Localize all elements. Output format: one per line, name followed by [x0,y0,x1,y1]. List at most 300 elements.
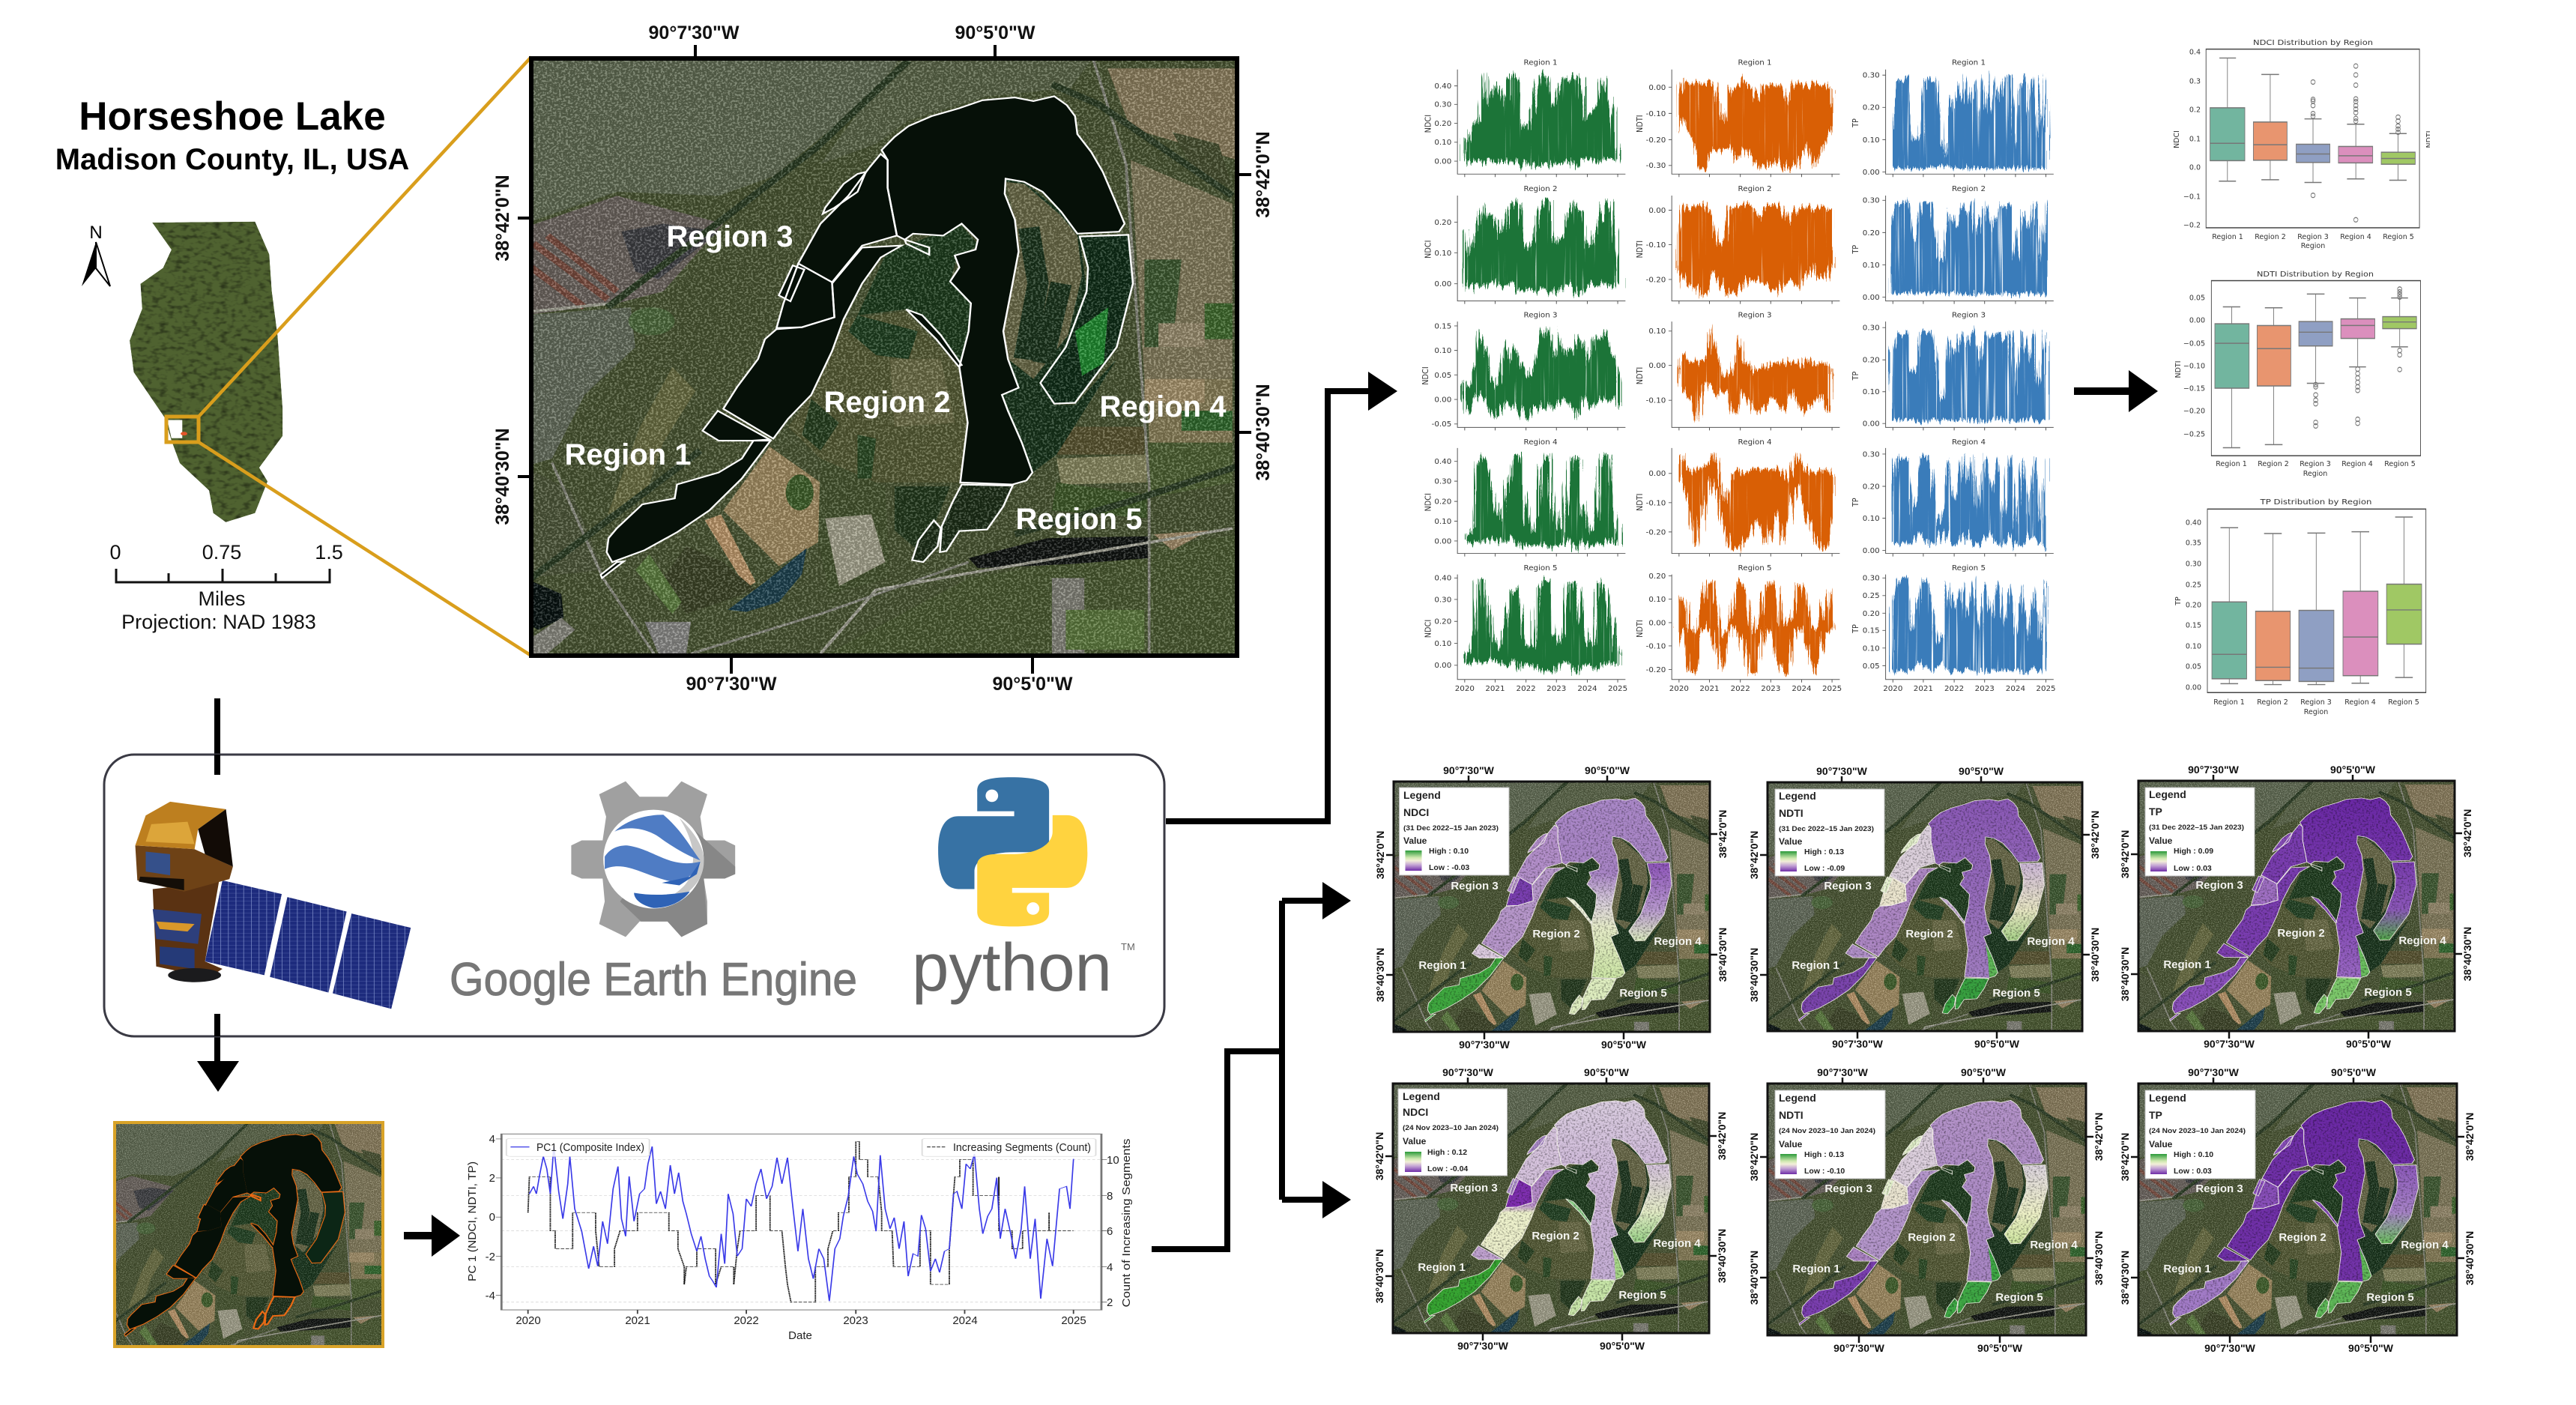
map: NDCI 24 Nov 2023 to 10 Jan 2024: Region 5 [1618,1289,1666,1302]
column: NDCI time series: 0.30 [1434,101,1451,109]
column: NDCI time series: 0.30 [1434,478,1451,486]
map: NDCI 31 Dec 2022 to 15 Jan 2023: Region 2 [1532,928,1580,940]
chart: PC1 composite index and increasing segments: Date [788,1329,812,1342]
chart: TP box plot: Region 1 [2213,698,2245,707]
chart: PC1 composite index and increasing segments: 8 [1107,1190,1113,1203]
column: NDCI time series: 0.40 [1434,82,1451,91]
column: TP time series: 0.10 [1863,645,1880,653]
chart: NDCI box plot [2173,39,2434,250]
legend [1400,788,1509,875]
map: NDTI 24 Nov 2023 to 10 Jan 2024: 38°40'30"N [2093,1231,2105,1285]
PC1 line [530,1146,1074,1301]
legend: NDTI [1779,1109,1803,1121]
legend: Legend [1779,790,1816,802]
chart: NDTI box plot: Region 3 [2300,460,2331,468]
chart: NDTI box plot: NDTI [2174,360,2183,378]
column: TP time series: 0.20 [1863,357,1880,365]
column: NDCI time series: 0.10 [1434,139,1451,147]
map: TP 31 Dec 2022 to 15 Jan 2023: 38°42'0"N [2461,809,2473,857]
column: NDTI time series: -0.10 [1646,499,1666,507]
chart: NDTI box plot: Region 5 [2384,460,2416,468]
legend: (31 Dec 2022–15 Jan 2023) [1779,825,1874,833]
map: NDTI 31 Dec 2022 to 15 Jan 2023: 38°42'0"N [1748,831,1760,879]
map: NDCI 24 Nov 2023 to 10 Jan 2024: 90°7'30"W [1442,1066,1494,1078]
map: NDCI 31 Dec 2022 to 15 Jan 2023: 38°40'30"N [1717,928,1729,982]
column: TP time series: 0.00 [1863,294,1880,302]
column: NDCI time series: 0.10 [1434,250,1451,258]
column: NDTI time series: NDTI [1636,367,1645,384]
column: NDTI time series: -0.20 [1646,529,1666,537]
arrow: time series to box plots [2074,370,2158,412]
map: NDTI 24 Nov 2023 to 10 Jan 2024: 90°5'0"W [1977,1342,2023,1354]
legend: Value [2149,836,2173,846]
legend: Low : -0.10 [1804,1167,1845,1176]
column: TP time series: 0.00 [1863,169,1880,177]
panel: main study area map [492,22,1274,695]
map: TP 31 Dec 2022 to 15 Jan 2023: Region 3 [2195,879,2243,892]
map: NDTI 31 Dec 2022 to 15 Jan 2023: Region 1 [1792,959,1839,972]
chart: NDCI box plot: −0.2 [2183,222,2201,229]
column: TP time series: 0.25 [1863,592,1880,600]
legend: (31 Dec 2022–15 Jan 2023) [2149,824,2244,832]
map: NDCI 24 Nov 2023 to 10 Jan 2024: Region 1 [1418,1261,1466,1274]
legend: High : 0.10 [2174,1150,2213,1159]
column: NDTI time series: 0.00 [1648,84,1666,92]
map: TP 24 Nov 2023 to 10 Jan 2024 [2119,1066,2480,1374]
column: TP time series: TP [1852,245,1860,255]
map: NDCI 31 Dec 2022 to 15 Jan 2023: 90°7'30"W [1443,764,1495,776]
legend: Low : 0.03 [2174,864,2212,873]
column: NDCI time series: 0.00 [1434,396,1451,404]
chart: NDTI box plot: Region 2 [2258,460,2289,468]
icon: north arrow [82,223,110,286]
legend: Legend [1779,1092,1816,1104]
column: TP time series: 0.10 [1863,515,1880,523]
column: TP time series: 0.20 [1863,483,1880,491]
panel: main study area map: 90°7'30"W [649,22,740,43]
map: NDTI 24 Nov 2023 to 10 Jan 2024: 90°7'30"W [1833,1342,1885,1354]
column: NDCI time series: 0.10 [1434,518,1451,526]
column: TP time series: 0.30 [1863,575,1880,583]
column: NDTI time series: Region 5 [1738,564,1772,572]
chart: PC1 composite index and increasing segments [466,1133,1133,1342]
map: NDTI 24 Nov 2023 to 10 Jan 2024: Region 5 [1995,1291,2043,1304]
chart: NDCI box plot: 0.0 [2189,163,2201,172]
map: NDTI 31 Dec 2022 to 15 Jan 2023: Region 5 [1992,987,2040,1000]
map: TP 24 Nov 2023 to 10 Jan 2024: 38°40'30"N [2464,1231,2476,1285]
column: NDTI time series: Region 3 [1738,312,1772,319]
column: TP time series: Region 5 [1952,564,1986,572]
column: TP time series: 2023 [1975,685,1995,693]
chart: NDTI box plot: Region 4 [2341,460,2373,468]
map: TP 31 Dec 2022 to 15 Jan 2023: Region 5 [2364,986,2412,999]
map: NDCI 31 Dec 2022 to 15 Jan 2023: 90°5'0"W [1585,764,1630,776]
panel: main study area map: 90°5'0"W [992,674,1073,695]
column: NDCI time series: 0.00 [1434,538,1451,546]
map: NDTI 31 Dec 2022 to 15 Jan 2023: 90°7'30"W [1816,765,1868,777]
column: NDCI time series: 0.00 [1434,280,1451,288]
column: NDTI time series: -0.20 [1646,136,1666,145]
legend: High : 0.12 [1427,1148,1467,1157]
panel: tools box [104,755,1164,1036]
legend [2145,1090,2255,1179]
map: NDTI 31 Dec 2022 to 15 Jan 2023: 90°5'0"W [1959,765,2004,777]
column: NDTI time series: 0.00 [1648,362,1666,370]
chart: NDTI box plot: Region 1 [2216,460,2247,468]
column: NDCI time series: 0.15 [1434,323,1451,330]
chart: PC1 composite index and increasing segments: 2 [489,1172,495,1185]
column: NDCI time series: 0.20 [1434,618,1451,626]
column: TP time series: TP [1852,624,1860,634]
map: NDCI 24 Nov 2023 to 10 Jan 2024: 38°42'0"N [1716,1112,1728,1160]
panel: main study area map: 90°7'30"W [686,674,777,695]
legend: NDCI [1403,1106,1428,1118]
chart: TP box plot: 0.30 [2186,561,2201,568]
map: NDCI 31 Dec 2022 to 15 Jan 2023: Region 3 [1451,880,1499,892]
legend: Low : 0.03 [2174,1167,2212,1176]
column: NDTI time series: 0.00 [1648,207,1666,215]
panel: main study area map: Region 5 [1016,503,1142,536]
map: NDCI 31 Dec 2022 to 15 Jan 2023: 38°42'0"N [1374,831,1386,879]
column: TP time series: TP [1852,372,1860,381]
map: NDTI 31 Dec 2022 to 15 Jan 2023: 38°40'30"N [2089,928,2101,982]
chart: TP box plot: 0.25 [2186,581,2201,589]
column: NDCI time series: 0.10 [1434,640,1451,648]
panel: satellite inset with lake outline [94,1113,399,1379]
legend: Low : -0.03 [1429,863,1469,872]
chart: TP box plot: TP Distribution by Region [2259,498,2372,507]
chart: PC1 composite index and increasing segments: PC1 (Composite Index) [536,1141,644,1154]
map: NDTI 24 Nov 2023 to 10 Jan 2024: 90°5'0"W [1961,1066,2007,1078]
chart: PC1 composite index and increasing segments: 4 [489,1133,495,1146]
column: TP time series [1852,59,2056,693]
legend: Value [1403,836,1427,846]
column: TP time series: 0.30 [1863,324,1880,333]
chart: NDCI box plot: −0.1 [2183,193,2201,201]
column: NDCI time series: 0.00 [1434,158,1451,166]
scale bar: Projection: NAD 1983 [121,611,316,633]
map: NDCI 31 Dec 2022 to 15 Jan 2023: 38°40'30"N [1374,948,1386,1002]
chart: NDCI box plot: NDTI [2425,130,2434,148]
scale bar: 1.5 [315,541,343,563]
title: Horseshoe Lake [79,94,386,139]
map: NDTI 24 Nov 2023 to 10 Jan 2024: Region 1 [1792,1263,1840,1275]
map: NDCI 24 Nov 2023 to 10 Jan 2024: Region 4 [1653,1237,1701,1250]
panel: main study area map: Region 1 [565,438,691,471]
map: NDTI 31 Dec 2022 to 15 Jan 2023: 90°5'0"W [1974,1038,2020,1050]
chart: NDTI box plot: −0.20 [2183,408,2205,415]
map: NDCI 31 Dec 2022 to 15 Jan 2023: 38°42'0"N [1717,810,1729,858]
map: NDCI 31 Dec 2022 to 15 Jan 2023: Region 1 [1418,959,1466,972]
legend: High : 0.13 [1804,847,1844,856]
chart: PC1 composite index and increasing segments: 2 [1107,1296,1113,1309]
map: TP 24 Nov 2023 to 10 Jan 2024: 90°5'0"W [2331,1066,2377,1078]
icon: north arrow: N [89,223,103,243]
legend: TP [2149,1109,2162,1121]
legend [1775,1090,1885,1179]
chart: NDCI box plot: NDCI Distribution by Region [2253,39,2373,47]
panel: main study area map: 38°42'0"N [1253,131,1274,218]
column: NDTI time series: -0.10 [1646,110,1666,118]
legend: Legend [1403,789,1441,801]
chart: PC1 composite index and increasing segments: 2020 [515,1314,541,1327]
chart: NDTI box plot: Region [2303,470,2327,478]
column: NDCI time series [1422,59,1627,693]
legend: TP [2149,806,2162,818]
Illinois locator map [130,222,282,522]
chart: NDTI box plot: −0.25 [2183,430,2205,439]
map: NDCI 31 Dec 2022 to 15 Jan 2023: 90°7'30"W [1459,1039,1511,1051]
column: NDCI time series: 0.20 [1434,498,1451,506]
chart: NDTI box plot [2174,271,2421,478]
chart: PC1 composite index and increasing segments: 2023 [843,1314,868,1327]
column: NDTI time series: 0.10 [1648,596,1666,604]
column: TP time series: 0.00 [1863,547,1880,555]
column: NDCI time series: NDCI [1422,366,1430,385]
map: NDTI 24 Nov 2023 to 10 Jan 2024: Region 2 [1908,1231,1956,1244]
column: TP time series: 2025 [2036,685,2056,693]
map: TP 24 Nov 2023 to 10 Jan 2024: 90°5'0"W [2348,1342,2394,1354]
column: NDCI time series: 2021 [1485,685,1505,693]
legend: Low : -0.04 [1427,1164,1468,1173]
map: NDCI 24 Nov 2023 to 10 Jan 2024: 90°5'0"W [1584,1066,1630,1078]
chart: TP box plot: Region 3 [2300,698,2332,707]
column: NDTI time series: 0.00 [1648,620,1666,627]
column: TP time series: 0.10 [1863,136,1880,145]
column: TP time series: 2020 [1883,685,1902,693]
chart: PC1 composite index and increasing segments: -2 [486,1251,495,1263]
chart panel: time series small multiples [1422,59,2056,693]
map: NDTI 24 Nov 2023 to 10 Jan 2024: 38°40'30"N [1748,1251,1760,1305]
column: TP time series: TP [1852,498,1860,507]
column: TP time series: 0.05 [1863,662,1880,671]
column: TP time series: TP [1852,118,1860,128]
map: TP 31 Dec 2022 to 15 Jan 2023: Region 1 [2163,958,2211,971]
column: NDCI time series: 2022 [1517,685,1536,693]
zoom lines to study area [199,57,531,656]
column: TP time series: 0.30 [1863,451,1880,459]
column: TP time series: 0.20 [1863,610,1880,618]
column: NDCI time series: Region 1 [1524,59,1558,67]
map: TP 31 Dec 2022 to 15 Jan 2023: Region 2 [2277,927,2325,940]
scale bar: 0 [109,541,121,563]
column: NDCI time series: 0.10 [1434,347,1451,355]
chart: TP box plot: 0.40 [2186,519,2201,528]
column: NDTI time series: 0.00 [1648,470,1666,478]
column: TP time series: 2024 [2006,685,2025,693]
map: NDCI 31 Dec 2022 to 15 Jan 2023 [1374,764,1733,1070]
legend [2145,788,2255,876]
arrow: composite chart to maps [1152,882,1351,1249]
legend [1398,1089,1508,1176]
title: Madison County, IL, USA [55,143,409,176]
chart: NDCI box plot: 0.1 [2189,135,2201,144]
column: NDCI time series: 2024 [1577,685,1597,693]
scale bar: 0.75 [202,541,241,563]
chart: NDCI box plot: Region 4 [2340,233,2371,241]
column: NDTI time series: 2020 [1669,685,1689,693]
column: NDTI time series: 2021 [1699,685,1720,693]
column: NDCI time series: 0.05 [1434,372,1451,380]
chart: TP box plot [2174,498,2426,716]
map: NDCI 24 Nov 2023 to 10 Jan 2024: 90°5'0"W [1600,1340,1645,1352]
text: Google Earth Engine: Google Earth Engine [450,954,857,1006]
column: TP time series: 2021 [1914,685,1933,693]
column: NDTI time series: NDTI [1636,241,1645,259]
legend: (24 Nov 2023–10 Jan 2024) [1403,1124,1499,1132]
panel: main study area map: Region 3 [667,220,793,253]
map: NDTI 31 Dec 2022 to 15 Jan 2023: Region 3 [1824,880,1872,892]
column: NDCI time series: NDCI [1424,115,1433,133]
map: NDCI 24 Nov 2023 to 10 Jan 2024: Region 2 [1532,1230,1579,1242]
chart: NDTI box plot: −0.15 [2183,385,2205,393]
chart: TP box plot: 0.35 [2186,540,2201,547]
column: NDTI time series: Region 4 [1738,438,1772,447]
column: NDCI time series: Region 3 [1524,312,1558,319]
panel: main study area map: 38°40'30"N [1253,384,1274,481]
column: NDTI time series: -0.20 [1646,666,1666,674]
chart: NDCI box plot: Region 5 [2383,233,2414,241]
column: NDTI time series: -0.10 [1646,241,1666,250]
map: NDTI 31 Dec 2022 to 15 Jan 2023: 38°42'0"N [2089,811,2101,859]
chart: TP box plot: Region 2 [2257,698,2288,707]
chart: PC1 composite index and increasing segments: Increasing Segments (Count) [953,1141,1091,1154]
column: NDTI time series: -0.30 [1646,162,1666,170]
icon: Python logo [938,777,1087,926]
column: TP time series: 0.30 [1863,72,1880,80]
legend: Legend [1403,1090,1440,1102]
column: TP time series: Region 4 [1952,438,1986,447]
column: NDTI time series: -0.10 [1646,643,1666,650]
icon: Google Earth Engine gear [571,782,735,937]
map: NDCI 24 Nov 2023 to 10 Jan 2024: 38°40'30"N [1373,1249,1385,1303]
column: NDCI time series: 0.40 [1434,458,1451,466]
column: TP time series: 0.20 [1863,229,1880,238]
map: NDTI 24 Nov 2023 to 10 Jan 2024: 38°42'0"N [2093,1113,2105,1161]
map: TP 24 Nov 2023 to 10 Jan 2024: 90°7'30"W [2204,1342,2256,1354]
map: NDCI 24 Nov 2023 to 10 Jan 2024: Region 3 [1450,1182,1498,1194]
legend: High : 0.13 [1804,1150,1844,1159]
text: python wordmark: python [912,931,1112,1006]
column: NDTI time series: 2022 [1731,685,1750,693]
legend: NDCI [1403,806,1429,818]
increasing segments step line [528,1141,1074,1302]
map: NDCI 31 Dec 2022 to 15 Jan 2023: Region 5 [1619,987,1667,1000]
chart: TP box plot: Region [2304,708,2328,716]
chart: TP box plot: 0.05 [2186,662,2201,671]
column: NDTI time series [1636,59,1842,693]
legend: Low : -0.09 [1804,864,1845,873]
chart: TP box plot: Region 5 [2388,698,2419,707]
map: NDCI 31 Dec 2022 to 15 Jan 2023: 90°5'0"W [1601,1039,1647,1051]
column: NDTI time series: NDTI [1636,620,1645,638]
map: NDTI 24 Nov 2023 to 10 Jan 2024: 90°7'30"W [1817,1066,1869,1078]
column: TP time series: 0.10 [1863,388,1880,396]
arrow: map to tools [197,698,239,1092]
legend: Legend [2149,788,2186,800]
map: TP 24 Nov 2023 to 10 Jan 2024: 38°40'30"N [2119,1251,2131,1305]
map: TP 31 Dec 2022 to 15 Jan 2023: Region 4 [2398,934,2446,947]
map: NDTI 31 Dec 2022 to 15 Jan 2023: 90°7'30"W [1832,1038,1884,1050]
column: NDCI time series: 2023 [1546,685,1566,693]
column: NDTI time series: 2024 [1792,685,1812,693]
chart: NDCI box plot: 0.4 [2189,48,2201,57]
legend: (24 Nov 2023–10 Jan 2024) [1779,1127,1875,1135]
chart: PC1 composite index and increasing segments: 4 [1107,1261,1113,1274]
legend: Value [1403,1136,1427,1146]
map: TP 24 Nov 2023 to 10 Jan 2024: 90°7'30"W [2188,1066,2240,1078]
map: NDTI 31 Dec 2022 to 15 Jan 2023: 38°40'30"N [1748,948,1760,1002]
column: TP time series: Region 1 [1952,59,1986,67]
chart: PC1 composite index and increasing segments: -4 [486,1290,495,1302]
map: TP 24 Nov 2023 to 10 Jan 2024: Region 5 [2366,1291,2414,1304]
arrow: inset to composite chart [404,1215,460,1257]
panel: main study area map: Region 2 [824,386,950,419]
legend: Value [1779,1139,1803,1149]
panel: main study area map: Region 4 [1100,390,1227,423]
map: NDTI 24 Nov 2023 to 10 Jan 2024: Region 3 [1824,1182,1872,1195]
chart: PC1 composite index and increasing segments: 10 [1107,1154,1119,1167]
chart: NDTI box plot: 0.05 [2189,294,2205,303]
column: TP time series: Region 2 [1952,185,1986,193]
chart: PC1 composite index and increasing segments: 2021 [625,1314,650,1327]
chart: PC1 composite index and increasing segments: 2022 [734,1314,759,1327]
legend: Value [1779,836,1803,847]
scale bar: Miles [198,587,246,610]
map: TP 31 Dec 2022 to 15 Jan 2023 [2119,764,2478,1069]
column: NDCI time series: 2025 [1608,685,1627,693]
scale bar [109,541,343,633]
chart: TP box plot: 0.15 [2186,622,2201,629]
map: NDCI 24 Nov 2023 to 10 Jan 2024: 38°40'30"N [1716,1229,1728,1283]
map: TP 24 Nov 2023 to 10 Jan 2024: Region 2 [2279,1231,2326,1244]
chart: NDTI box plot: NDTI Distribution by Region [2257,271,2374,279]
legend: NDTI [1779,807,1803,819]
arrow: tools to time series [1166,372,1397,821]
map: TP 31 Dec 2022 to 15 Jan 2023: 90°5'0"W [2330,764,2376,776]
chart: TP box plot: 0.10 [2186,643,2201,650]
column: NDTI time series: NDTI [1636,493,1645,511]
chart: NDTI box plot: −0.10 [2183,363,2205,370]
chart: NDCI box plot: Region [2301,242,2325,250]
map: NDTI 24 Nov 2023 to 10 Jan 2024 [1748,1066,2109,1374]
legend: Legend [2149,1092,2186,1104]
map: TP 24 Nov 2023 to 10 Jan 2024: 38°42'0"N [2464,1113,2476,1161]
column: TP time series: 0.20 [1863,104,1880,112]
column: NDTI time series: 0.20 [1648,572,1666,581]
chart: PC1 composite index and increasing segments: 2024 [952,1314,978,1327]
chart: NDCI box plot: NDCI [2173,130,2181,148]
column: NDCI time series: 2020 [1455,685,1475,693]
chart: NDTI box plot: 0.00 [2189,316,2205,325]
column: TP time series: 0.10 [1863,262,1880,270]
column: NDTI time series: 0.10 [1648,327,1666,336]
map: NDTI 31 Dec 2022 to 15 Jan 2023: Region 2 [1905,928,1953,940]
legend: Value [2149,1139,2173,1149]
column: NDCI time series: 0.00 [1434,662,1451,670]
column: TP time series: 2022 [1944,685,1964,693]
chart: PC1 composite index and increasing segments: Count of Increasing Segments [1120,1139,1133,1307]
column: TP time series: 0.15 [1863,627,1880,635]
map: TP 31 Dec 2022 to 15 Jan 2023: 38°40'30"N [2119,947,2131,1001]
map: TP 24 Nov 2023 to 10 Jan 2024: 38°42'0"N [2119,1133,2131,1181]
column: NDTI time series: Region 2 [1738,185,1772,193]
column: NDCI time series: 0.20 [1434,219,1451,227]
map: NDTI 24 Nov 2023 to 10 Jan 2024: Region 4 [2030,1239,2078,1251]
chart: PC1 composite index and increasing segments: 2025 [1061,1314,1086,1327]
panel: main study area map: 38°42'0"N [492,175,513,262]
column: NDCI time series: NDCI [1424,493,1433,511]
